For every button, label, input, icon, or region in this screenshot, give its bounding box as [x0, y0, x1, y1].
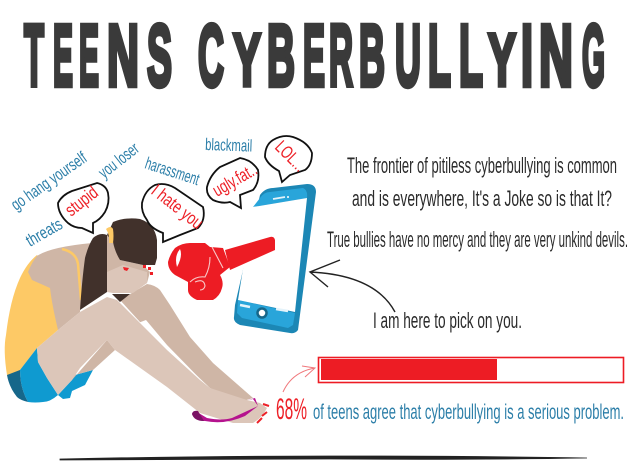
eye and nails	[123, 265, 153, 275]
title: S	[147, 8, 172, 104]
phone bottom bezel	[237, 300, 295, 328]
shorts shadow	[7, 370, 28, 402]
title: N	[539, 8, 573, 104]
floating insults: you loser	[95, 139, 143, 182]
glove creases	[190, 247, 223, 290]
title: T	[24, 8, 44, 104]
speaker	[273, 197, 289, 199]
phone	[234, 184, 316, 333]
speech bubble: ugly.fat..	[207, 158, 261, 208]
shirt strap	[62, 249, 81, 300]
title: L	[428, 8, 451, 104]
gap between legs	[138, 320, 210, 389]
hand	[107, 265, 147, 293]
shorts	[20, 348, 58, 402]
toenails	[257, 404, 269, 423]
title	[24, 8, 605, 104]
title: E	[53, 8, 73, 104]
floating insults: threats	[22, 215, 66, 250]
glove body	[168, 243, 230, 300]
phone screen	[238, 198, 307, 312]
floating insults	[7, 135, 252, 250]
speech bubble: LOL...	[265, 136, 312, 182]
title: L	[459, 8, 483, 104]
title: N	[107, 8, 139, 104]
near leg	[37, 297, 267, 423]
flip-flop sole shadow	[192, 411, 204, 421]
title: I	[521, 8, 533, 104]
speech bubble: LOL...: LOL...	[271, 137, 310, 176]
title: E	[303, 8, 325, 104]
title: C	[198, 8, 224, 104]
far leg	[120, 284, 253, 402]
title: Y	[233, 20, 261, 102]
progress bar	[318, 358, 624, 382]
bar fill 68%	[321, 359, 497, 380]
back and shoulder	[28, 243, 92, 330]
text block: intro	[347, 153, 617, 211]
far side of shorts	[58, 370, 93, 399]
small arrow to bar	[283, 366, 315, 392]
phone keys	[240, 305, 288, 311]
title: U	[395, 8, 421, 104]
bottom rule	[60, 456, 587, 460]
home button	[258, 308, 266, 318]
speech bubble: stupid	[58, 182, 109, 233]
speech bubble: I hate you: I hate you	[148, 180, 207, 233]
title: R	[329, 8, 353, 104]
title: B	[267, 8, 295, 104]
glove highlights	[176, 249, 181, 267]
floating insults: blackmail	[205, 135, 252, 156]
hair tip near knee	[112, 294, 130, 302]
speech bubble: ugly.fat..: ugly.fat..	[209, 159, 261, 200]
floating insults: go hang yourself	[7, 148, 91, 214]
face	[107, 235, 150, 292]
hair band	[106, 227, 114, 243]
shirt	[5, 255, 84, 375]
title: E	[79, 8, 99, 104]
speech bubble: stupid: stupid	[61, 182, 102, 220]
flip-flop	[192, 398, 258, 422]
illustration: sad teen girl sitting	[5, 218, 269, 423]
title: B	[359, 8, 385, 104]
statistic: 68%: 68%	[276, 393, 307, 426]
arrow to phone	[310, 260, 395, 312]
thigh fold	[72, 340, 115, 380]
boxing glove	[168, 237, 275, 300]
title: Y	[488, 20, 516, 102]
text block: pick on you: I am here to pick on you.	[373, 308, 522, 333]
floating insults: harassment	[143, 154, 202, 189]
hair	[80, 218, 157, 310]
phone top bezel	[253, 188, 307, 207]
